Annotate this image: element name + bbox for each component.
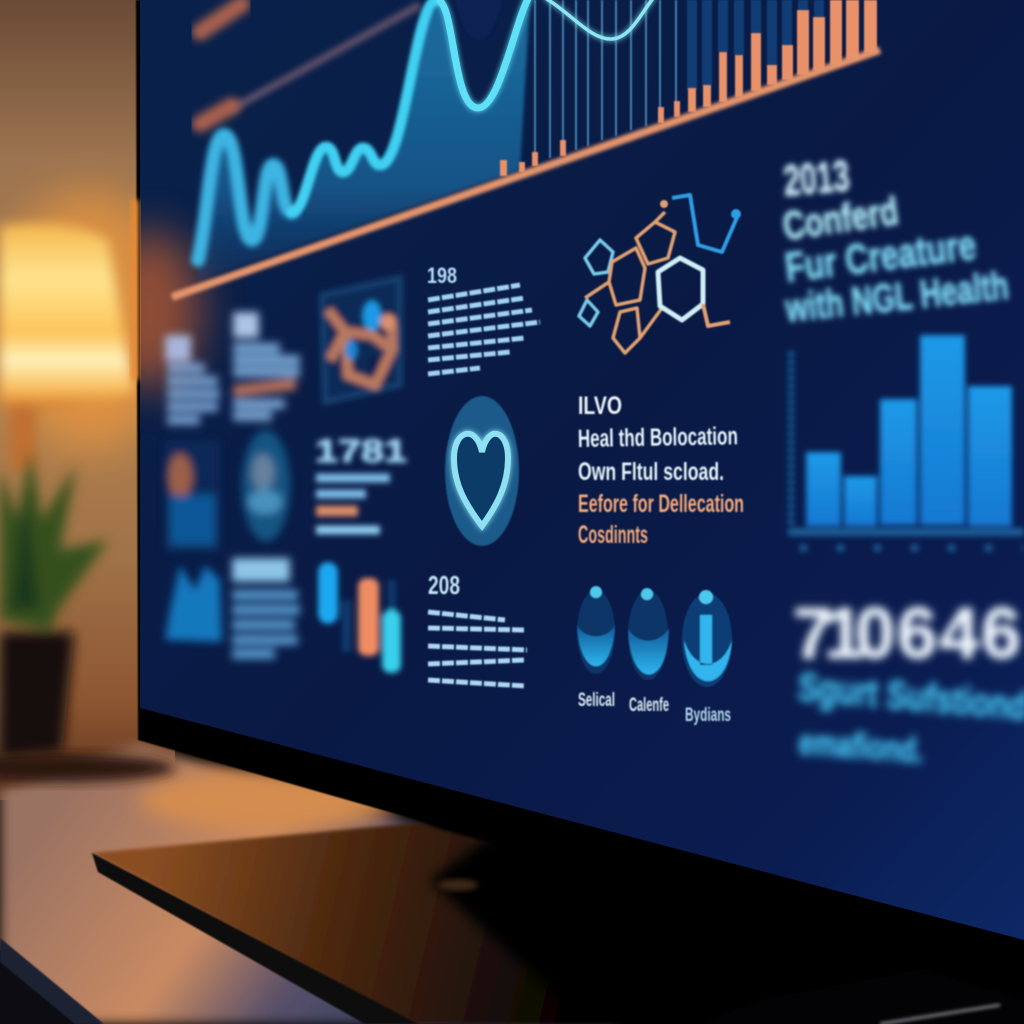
chart filled area (198, 0, 530, 280)
wall background (0, 0, 175, 800)
left blurred panels (165, 312, 300, 654)
y axis ticks (788, 352, 794, 525)
centre text block (578, 392, 744, 549)
gauge: Bydians: Bydians (685, 705, 731, 726)
centre heading: ILVO (578, 392, 622, 420)
bars (806, 452, 841, 526)
molecule hexagons orange (585, 212, 675, 353)
gauge: Bydians (682, 590, 732, 726)
main wave line right part (437, 0, 530, 108)
molecule hexagon white (658, 258, 703, 320)
molecule side chain blue (672, 195, 738, 252)
middle small stat text: 1781 (315, 433, 407, 469)
small text block: 1998 (427, 263, 540, 374)
pot shadow (0, 754, 175, 782)
heart outline (454, 434, 508, 526)
right bar chart (788, 335, 1024, 548)
screen edge warm glow (100, 230, 200, 390)
desk surface (0, 745, 620, 1024)
gauge: Selical (577, 586, 615, 711)
lamp shade (0, 224, 134, 407)
main wave line middle part (292, 0, 437, 212)
dark gap between peaks (455, 0, 502, 40)
main wave line left part (198, 135, 292, 260)
faint upper trend line (230, 5, 420, 110)
potted plant (0, 450, 108, 758)
top line chart panel (172, 0, 880, 297)
plant leaves (0, 450, 108, 630)
vertical data lines (535, 0, 676, 160)
orange edge strip (131, 200, 139, 380)
centre body text: Heal thd Bolocation (578, 422, 738, 453)
orange baseline (172, 50, 880, 297)
gauge: Calenfe: Calenfe (629, 695, 669, 716)
molecule diagram (579, 195, 741, 353)
monitor stand base (92, 823, 1024, 1024)
secondary wave line (545, 0, 654, 39)
right heading: Conferd (780, 189, 901, 249)
molecule hexagons blue (579, 240, 613, 326)
x axis (788, 528, 1024, 536)
plant pot (0, 632, 74, 758)
small text block: 2008 (428, 570, 527, 686)
three round gauge icons (577, 586, 732, 726)
text block lower left (232, 558, 300, 654)
heart disc (445, 396, 519, 546)
small vertical bars (318, 562, 401, 673)
table lamp (0, 224, 134, 470)
left circular gauge (242, 430, 290, 542)
molecule side chain orange (703, 304, 730, 326)
left mini chart (165, 565, 222, 642)
orange bars (500, 0, 877, 176)
text block left 2 (233, 312, 300, 416)
text block left 1 (165, 335, 220, 420)
orange tags (200, 4, 242, 124)
heart icon (445, 396, 519, 546)
right caption (796, 665, 1024, 771)
small text block: 1998: 198 (427, 263, 457, 288)
left tile icon (165, 440, 220, 552)
big numbers: 710 6 4 6 (793, 594, 1021, 674)
centre text block: Cosdinnts (578, 521, 648, 549)
chart y axis (172, 0, 184, 262)
upper blue columns (692, 0, 819, 90)
right caption: emafiond. (797, 721, 925, 771)
monitor screen (140, 0, 1024, 940)
molecule tile (322, 278, 400, 402)
right heading (780, 151, 1011, 331)
gauge: Selical: Selical (578, 690, 615, 711)
centre text block: Own Fltul scload. (578, 458, 724, 486)
centre orange text: Eefore for Dellecation (578, 490, 744, 518)
lamp stem (10, 400, 36, 470)
right heading: 2013 (782, 151, 852, 206)
middle small stat text (315, 433, 407, 530)
lamp glow (0, 190, 180, 450)
gauge: Calenfe (628, 588, 669, 716)
small text block: 2008: 208 (428, 570, 460, 600)
